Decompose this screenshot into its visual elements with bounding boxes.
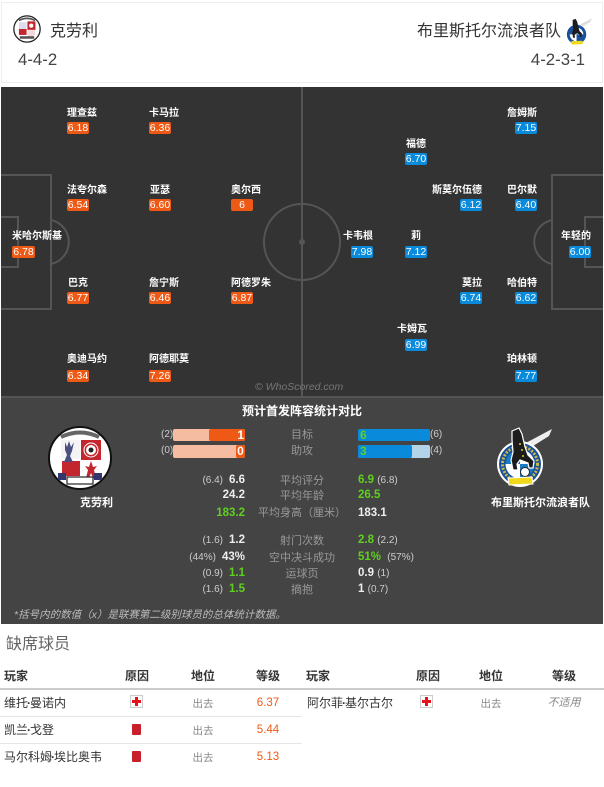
away age: 26.5 <box>358 489 380 501</box>
player: 理查兹: 理查兹 <box>67 108 97 119</box>
stats title: 预计首发阵容统计对比 <box>242 404 362 418</box>
away goals baseline: (6) <box>430 429 442 440</box>
player: 阿德罗朱 <box>231 277 271 304</box>
player: 莫拉: 6.74 <box>461 292 481 304</box>
icon: red card <box>132 751 141 762</box>
icon: away team crest small <box>566 18 592 45</box>
away tackles: 1 (0.7) <box>358 583 388 595</box>
player: 珀林顿 <box>507 353 537 382</box>
away assists bar <box>358 445 430 458</box>
row: 马尔科姆·埃比奥韦: 出去 <box>192 752 214 764</box>
player: 法夸尔森: 6.54 <box>68 199 88 211</box>
home team name: 克劳利 <box>50 23 98 40</box>
player: 卡马拉: 6.36 <box>150 122 170 134</box>
row: tackles <box>0 582 604 597</box>
player: 哈伯特: 哈伯特 <box>507 278 537 289</box>
home height: 183.2 <box>216 507 245 519</box>
player: 福德 <box>405 138 427 165</box>
away rating: 6.9 (6.8) <box>358 474 398 486</box>
away assists baseline: (4) <box>430 445 442 456</box>
player: 莉: 莉 <box>411 231 421 242</box>
player: 奥尔西 <box>231 184 261 211</box>
header: player: 玩家 <box>4 669 28 683</box>
row: 维托·曼诺内 <box>0 690 302 716</box>
player: 阿德罗朱: 阿德罗朱 <box>231 278 271 289</box>
player: 斯莫尔伍德: 斯莫尔伍德 <box>432 185 482 196</box>
player: 卡韦根: 7.98 <box>352 246 372 258</box>
player: 米哈尔斯基: 6.78 <box>13 246 34 258</box>
label: assists: 助攻 <box>291 445 313 457</box>
tackles label: 摘抱 <box>291 584 313 596</box>
player: 莉: 7.12 <box>406 246 426 258</box>
player: 奥迪马约 <box>67 353 107 382</box>
player: 哈伯特 <box>507 277 537 304</box>
panel: lineup statistics comparison <box>1 396 603 624</box>
rating label: 平均评分 <box>280 475 324 487</box>
header: player: 玩家 <box>306 669 330 683</box>
player: 年轻的: 6.00 <box>570 246 590 258</box>
player: 福德: 6.70 <box>406 153 426 165</box>
home age: 24.2 <box>223 489 245 501</box>
player: 巴尔默: 巴尔默 <box>507 185 537 196</box>
icon: Crawley crest <box>48 426 112 490</box>
home assists baseline: (0) <box>161 445 173 456</box>
icon: home team crest small <box>13 15 41 43</box>
row: average age <box>223 489 380 502</box>
player: 珀林顿: 7.77 <box>516 370 536 382</box>
player: 年轻的 <box>561 230 591 258</box>
row: 维托·曼诺内: 出去 <box>192 698 214 710</box>
player: 卡姆瓦 <box>397 323 427 351</box>
icon: Bristol Rovers crest <box>497 427 552 487</box>
player: 哈伯特: 6.62 <box>516 292 536 304</box>
away goals bar <box>358 429 430 441</box>
row: 维托·曼诺内: 维托·曼诺内 <box>4 696 66 710</box>
player: 福德: 福德 <box>406 139 426 150</box>
row: 阿尔菲·基尔古尔 <box>302 690 604 716</box>
away assists bar: 3 <box>360 444 367 458</box>
assists comparison <box>161 444 442 458</box>
table: away missing players <box>302 660 604 720</box>
player: 阿德罗朱: 6.87 <box>232 292 252 304</box>
away height: 183.1 <box>358 507 387 519</box>
header: rating: 等级 <box>256 669 280 683</box>
player: 奥迪马约: 奥迪马约 <box>67 354 107 365</box>
icon: injury <box>130 695 143 708</box>
away team name: 布里斯托尔流浪者队 <box>417 23 561 40</box>
player: 卡马拉: 卡马拉 <box>149 108 179 119</box>
row: 阿尔菲·基尔古尔: 出去 <box>480 698 502 710</box>
player: 亚瑟: 亚瑟 <box>150 185 170 196</box>
player: 詹宁斯: 詹宁斯 <box>149 278 179 289</box>
row: shots <box>202 534 398 547</box>
player: 莫拉 <box>460 276 482 304</box>
header: teams and formations <box>1 2 603 83</box>
home shots: (1.6) 1.2 <box>202 534 245 546</box>
player: 卡韦根: 卡韦根 <box>343 231 373 242</box>
player: 莉 <box>405 230 427 258</box>
away shots: 2.8 (2.2) <box>358 534 398 546</box>
row: 维托·曼诺内: 6.37 <box>257 697 279 709</box>
home tackles: (1.6) 1.5 <box>202 583 245 595</box>
player: 奥尔西: 6 <box>239 199 245 211</box>
home assists bar: 0 <box>237 444 244 458</box>
row: average rating <box>202 474 398 487</box>
home formation: 4-4-2 <box>18 50 57 69</box>
home rating: (6.4) 6.6 <box>202 474 245 486</box>
player: 斯莫尔伍德: 6.12 <box>461 199 481 211</box>
pitch markings <box>1 87 603 396</box>
player: 詹姆斯: 7.15 <box>516 122 536 134</box>
footnote: *括号内的数值（x）是联赛第二级别球员的总体统计数据。 <box>14 609 286 621</box>
player: 斯莫尔伍德 <box>432 184 482 211</box>
table: home missing players <box>0 660 302 770</box>
home team label: 克劳利 <box>80 497 113 509</box>
away aerial: 51% (57%) <box>358 551 414 563</box>
stats content <box>14 404 590 621</box>
player: 巴克: 6.77 <box>68 292 88 304</box>
player: 卡马拉 <box>149 106 179 134</box>
home aerial: (44%) 43% <box>189 551 245 563</box>
player: 奥迪马约: 6.34 <box>68 370 88 382</box>
player: 亚瑟: 6.60 <box>150 199 170 211</box>
player: 法夸尔森: 法夸尔森 <box>67 185 107 196</box>
away goals bar: 6 <box>360 428 367 442</box>
row: average height <box>216 506 387 519</box>
player: 詹宁斯: 6.46 <box>150 292 170 304</box>
home dribbles: (0.9) 1.1 <box>202 567 245 579</box>
header: position: 地位 <box>191 669 215 683</box>
row: 阿尔菲·基尔古尔: 不适用 <box>548 697 580 709</box>
player: 理查兹 <box>67 107 97 134</box>
player: 年轻的: 年轻的 <box>561 231 591 242</box>
player: 米哈尔斯基: 米哈尔斯基 <box>12 231 62 242</box>
row: 凯兰·戈登: 5.44 <box>257 724 279 736</box>
row: 马尔科姆·埃比奥韦: 马尔科姆·埃比奥韦 <box>4 750 102 764</box>
player: 巴尔默: 6.40 <box>516 199 536 211</box>
home lineup <box>12 106 271 382</box>
player: 卡姆瓦: 6.99 <box>406 339 426 351</box>
row: 马尔科姆·埃比奥韦 <box>0 744 302 770</box>
header: reason: 原因 <box>125 669 149 683</box>
row: aerial duels <box>0 550 604 565</box>
row: 凯兰·戈登 <box>0 717 302 743</box>
player: 莫拉: 莫拉 <box>462 278 482 289</box>
shots label: 射门次数 <box>280 535 324 547</box>
label: goals: 目标 <box>291 429 313 441</box>
player: 詹姆斯 <box>507 107 537 134</box>
home assists bar <box>173 445 245 458</box>
player: 卡姆瓦: 卡姆瓦 <box>397 324 427 335</box>
player: 巴克 <box>67 277 89 304</box>
player: 理查兹: 6.18 <box>68 122 88 134</box>
row: 凯兰·戈登: 出去 <box>192 725 214 737</box>
player: 巴尔默 <box>507 184 537 211</box>
player: 阿德耶莫: 7.26 <box>150 370 170 382</box>
away dribbles: 0.9 (1) <box>358 567 389 579</box>
aerial label: 空中决斗成功 <box>269 552 335 564</box>
player: 詹宁斯 <box>149 277 179 304</box>
height label: 平均身高（厘米） <box>258 507 346 519</box>
header: rating: 等级 <box>552 669 576 683</box>
icon: injury <box>420 695 433 708</box>
player: 珀林顿: 珀林顿 <box>507 354 537 365</box>
header: reason: 原因 <box>416 669 440 683</box>
player: 米哈尔斯基 <box>12 230 62 258</box>
goals comparison <box>161 428 442 442</box>
icon: red card <box>132 724 141 735</box>
player: 法夸尔森 <box>67 184 107 211</box>
home goals bar <box>173 429 245 441</box>
dribbles label: 运球页 <box>286 568 318 580</box>
player: 詹姆斯: 詹姆斯 <box>507 108 537 119</box>
player: 阿德耶莫: 阿德耶莫 <box>149 354 189 365</box>
row: 阿尔菲·基尔古尔: 阿尔菲·基尔古尔 <box>307 696 393 710</box>
home goals bar: 1 <box>237 428 244 442</box>
player: 巴克: 巴克 <box>68 278 88 289</box>
row: 马尔科姆·埃比奥韦: 5.13 <box>257 751 279 763</box>
home goals baseline: (2) <box>161 429 173 440</box>
away team label: 布里斯托尔流浪者队 <box>491 497 590 509</box>
player: 奥尔西: 奥尔西 <box>231 185 261 196</box>
row: 凯兰·戈登: 凯兰·戈登 <box>4 723 54 737</box>
player: 阿德耶莫 <box>149 353 189 382</box>
player: 卡韦根 <box>343 230 373 258</box>
watermark: © WhoScored.com <box>255 381 343 393</box>
away formation: 4-2-3-1 <box>531 50 585 69</box>
age label: 平均年龄 <box>280 490 324 502</box>
away lineup <box>343 107 591 382</box>
header: position: 地位 <box>479 669 503 683</box>
row: dribbles <box>0 566 604 581</box>
player: 亚瑟 <box>149 184 171 211</box>
section title: missing players: 缺席球员 <box>6 636 70 653</box>
panel: pitch with predicted lineups <box>1 87 603 396</box>
